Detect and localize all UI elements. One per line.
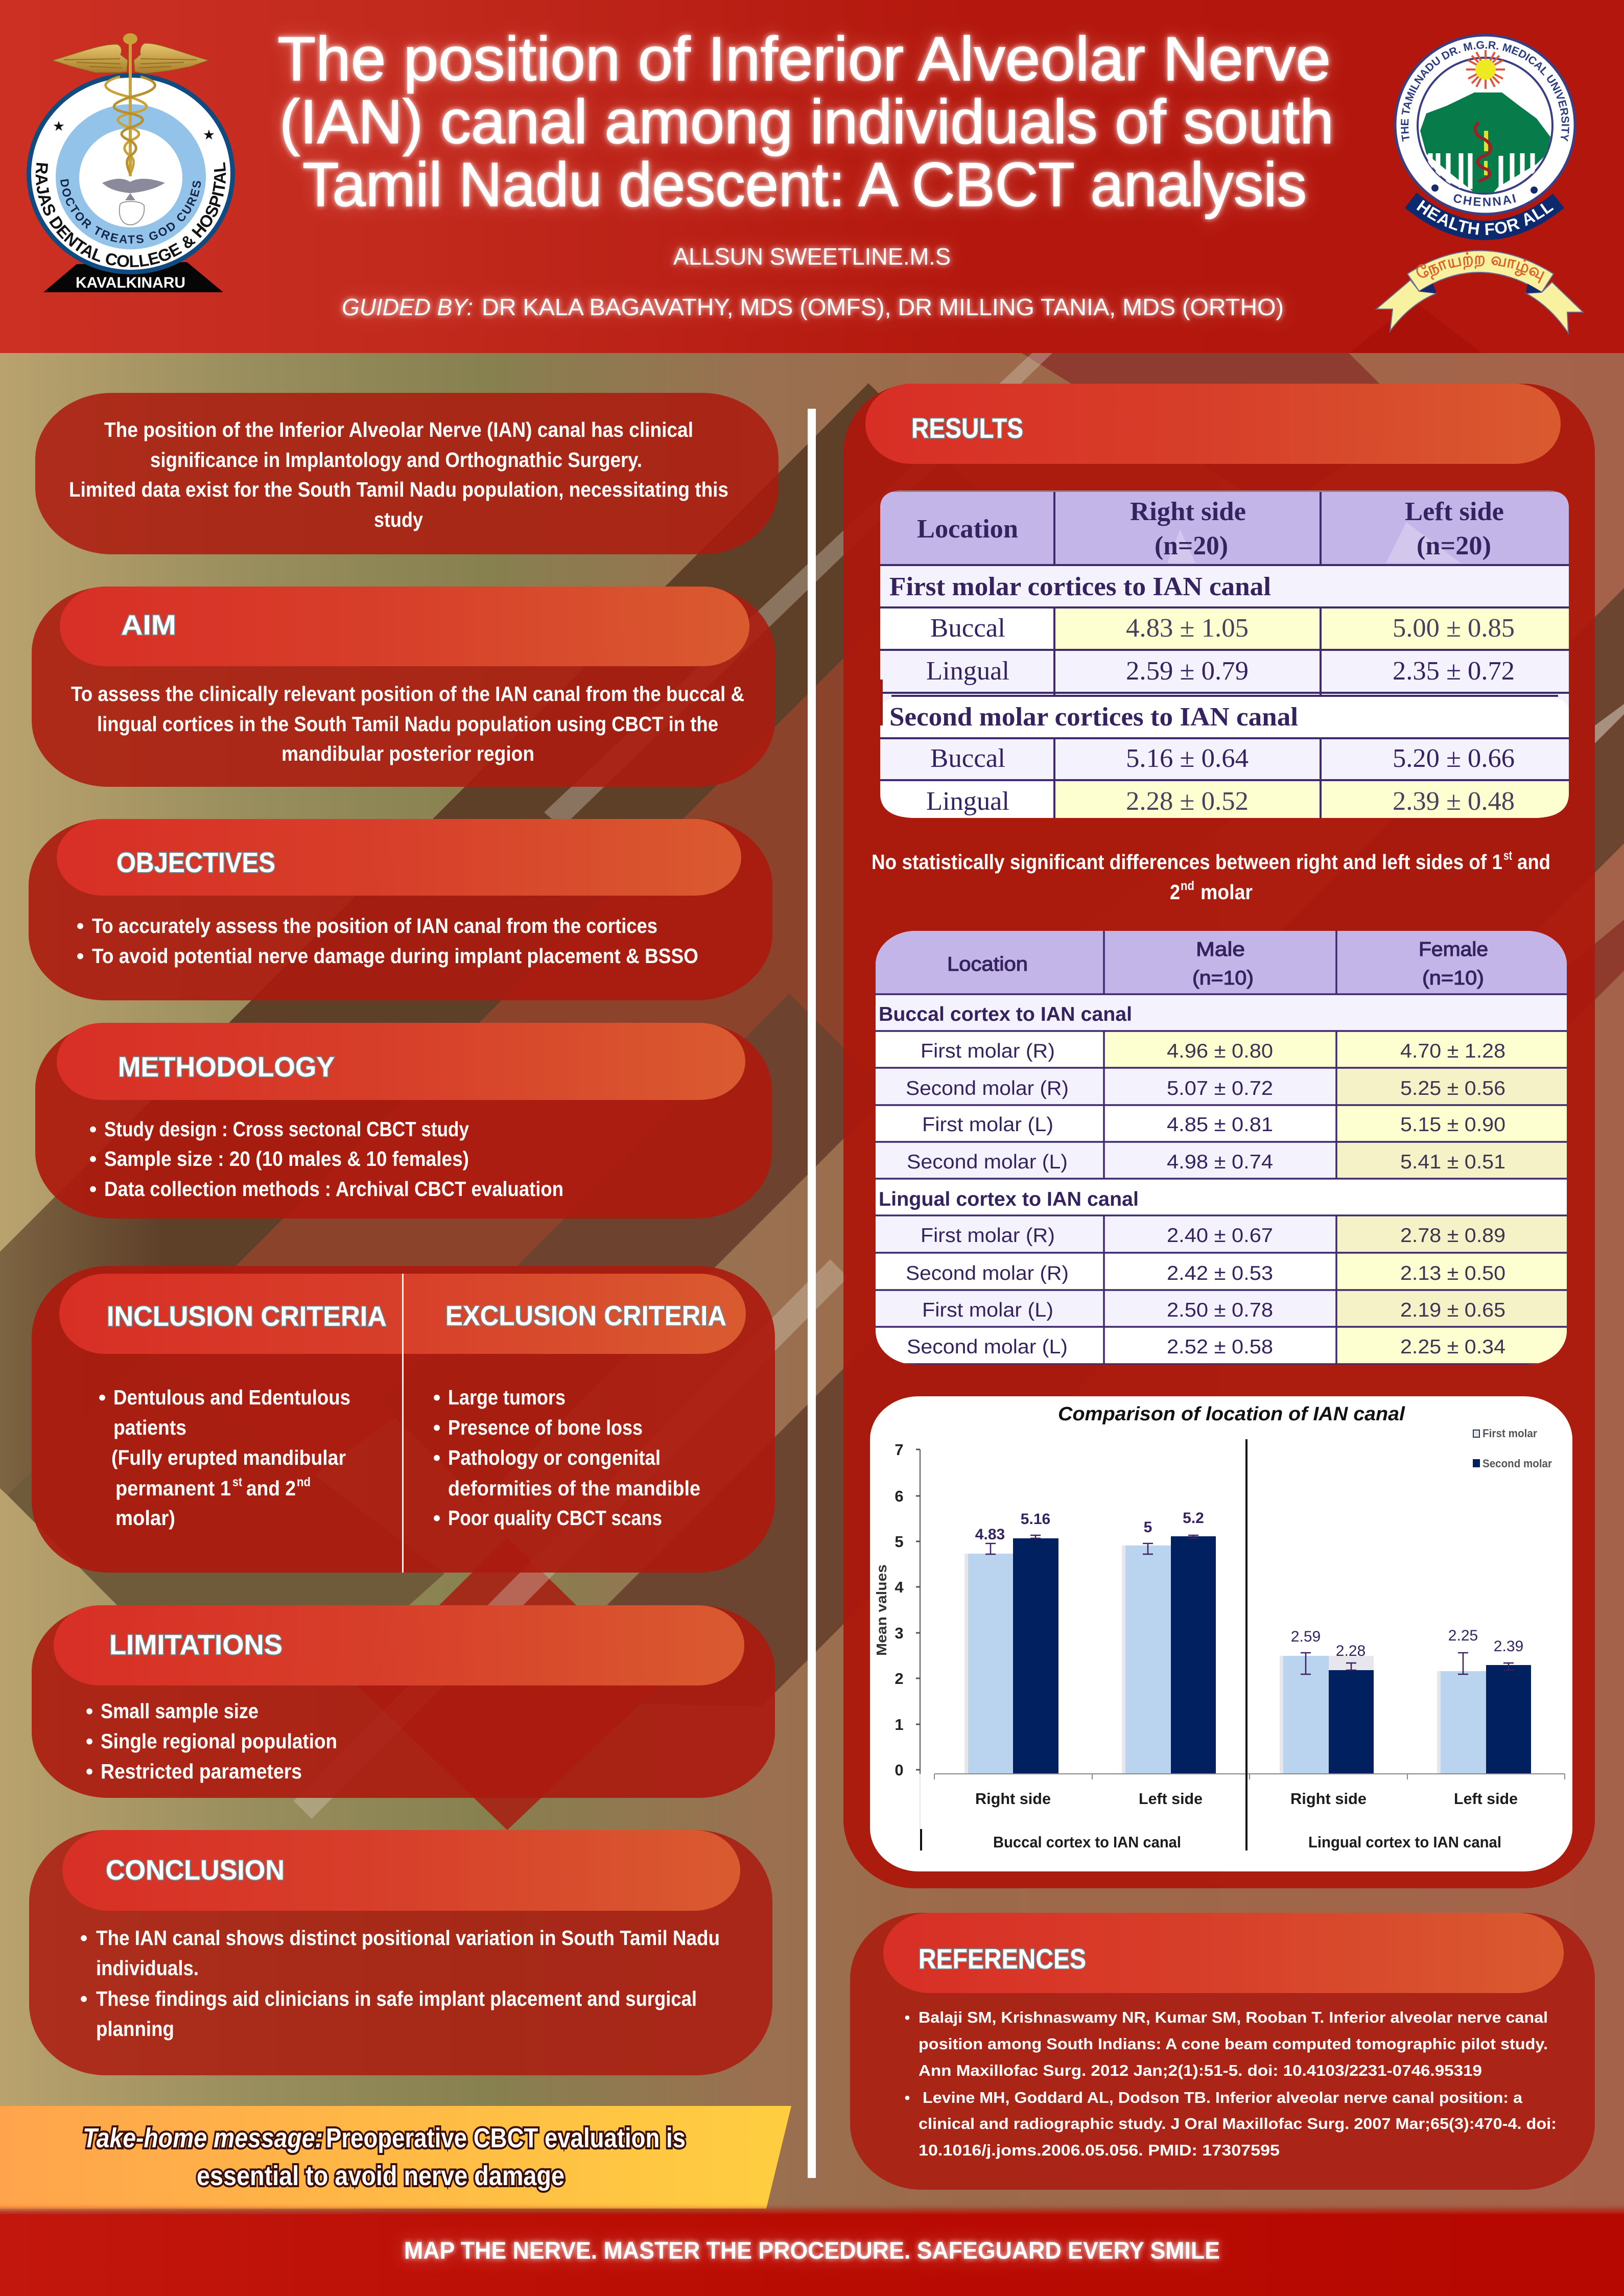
- table: right vs left side: 5.20 ± 0.66: [1393, 744, 1515, 773]
- list: inclusion criteria: permanent 1: [115, 1477, 231, 1500]
- table: male vs female: 5.15 ± 0.90: [1400, 1114, 1505, 1136]
- author: ALLSUN SWEETLINE.M.S: [673, 243, 951, 270]
- list: references: [905, 2008, 1557, 2159]
- list: references: Balaji SM, Krishnaswamy NR, Kumar SM, Rooban T. Inferior alveolar nerve canal: [919, 2008, 1548, 2026]
- list: references: Levine MH, Goddard AL, Dodson TB. Inferior alveolar nerve canal position: a: [923, 2089, 1523, 2106]
- text: aim: To assess the clinically relevant position of the IAN canal from the buccal &: [71, 682, 744, 706]
- table: male vs female: 4.96 ± 0.80: [1167, 1040, 1273, 1062]
- table: male vs female: First molar (L): [922, 1299, 1053, 1321]
- list: exclusion criteria: •: [433, 1386, 440, 1409]
- list: references: Ann Maxillofac Surg. 2012 Jan;2(1):51-5. doi: 10.4103/2231-0746.95319: [919, 2061, 1482, 2079]
- list: objectives: To accurately assess the position of IAN canal from the cortices: [92, 914, 657, 938]
- list: inclusion criteria: [99, 1386, 350, 1530]
- table: right vs left side: Location: [917, 514, 1018, 544]
- table: right vs left side: Right side: [1130, 497, 1246, 526]
- list: exclusion criteria: •: [433, 1416, 440, 1439]
- logo: Rajas Dental College: ★: [53, 119, 65, 134]
- table: male vs female: (n=10): [1192, 967, 1254, 989]
- panel: methodology: [35, 1023, 772, 1219]
- x axis: Right side: [975, 1790, 1051, 1808]
- list: references: 10.1016/j.joms.2006.05.056. PMID: 17307595: [919, 2141, 1280, 2159]
- table: right vs left side: 2.35 ± 0.72: [1393, 657, 1515, 686]
- value labels: 2.39: [1494, 1638, 1523, 1655]
- list: objectives: To avoid potential nerve damage during implant placement & BSSO: [92, 944, 698, 968]
- value labels: 2.28: [1336, 1643, 1366, 1659]
- y axis: [874, 1441, 920, 1829]
- chart legend: Second molar: [1482, 1457, 1552, 1470]
- list: limitations: Small sample size: [101, 1699, 258, 1723]
- panel: aim: [32, 587, 775, 787]
- list: methodology: •: [89, 1117, 97, 1141]
- panel: references: [850, 1913, 1595, 2190]
- y axis: Mean values: [874, 1564, 889, 1656]
- table: right vs left side: 2.39 ± 0.48: [1393, 787, 1515, 816]
- table: male vs female: First molar (R): [921, 1040, 1055, 1062]
- take-home banner: Preoperative CBCT evaluation is: [326, 2123, 686, 2153]
- table: right vs left side: 5.16 ± 0.64: [1126, 744, 1249, 773]
- text: aim: lingual cortices in the South Tamil Nadu population using CBCT in the: [97, 712, 718, 736]
- logo: Tamilnadu Dr MGR Medical University: HEALTH FOR ALL: [1416, 200, 1554, 235]
- table: right vs left side: Lingual: [926, 657, 1009, 686]
- chart legend: [1473, 1427, 1552, 1470]
- panel: limitations: [32, 1605, 775, 1798]
- list: exclusion criteria: •: [433, 1446, 440, 1469]
- panel: introduction: study: [374, 508, 423, 531]
- table: male vs female: Second molar (R): [906, 1077, 1069, 1099]
- list: methodology: Data collection methods : Archival CBCT evaluation: [104, 1177, 563, 1201]
- value labels: [975, 1510, 1523, 1659]
- heading: aim: AIM: [121, 609, 176, 641]
- heading: references: REFERENCES: [919, 1943, 1086, 1975]
- text: no significant difference: 2: [1170, 880, 1180, 904]
- list: limitations: •: [86, 1729, 93, 1753]
- heading: exclusion criteria: EXCLUSION CRITERIA: [445, 1300, 726, 1331]
- heading: results: RESULTS: [911, 412, 1023, 444]
- list: conclusion: individuals.: [96, 1956, 199, 1980]
- bars: [964, 1536, 1531, 1774]
- table: right vs left side: Left side: [1405, 497, 1504, 526]
- list: exclusion criteria: Presence of bone loss: [448, 1416, 643, 1439]
- title: The position of Inferior Alveolar Nerve: [277, 24, 1331, 93]
- title: [277, 24, 1334, 219]
- x axis: Lingual cortex to IAN canal: [1308, 1833, 1501, 1851]
- list: inclusion criteria: (Fully erupted mandibular: [111, 1446, 346, 1469]
- list: conclusion: These findings aid clinicians in safe implant placement and surgical: [96, 1987, 697, 2010]
- list: inclusion criteria: patients: [113, 1416, 186, 1439]
- y axis: 7: [895, 1441, 904, 1459]
- text: aim: [71, 682, 744, 765]
- heading: objectives: OBJECTIVES: [116, 847, 275, 878]
- logo: Tamilnadu Dr MGR Medical University: THE TAMILNADU DR. M.G.R. MEDICAL UNIVERSITY: [1401, 41, 1569, 142]
- header band: [0, 0, 1624, 353]
- table: right vs left side: 2.28 ± 0.52: [1126, 787, 1249, 816]
- y axis: 2: [895, 1670, 904, 1688]
- y axis: 5: [895, 1533, 904, 1551]
- table: male vs female: 2.40 ± 0.67: [1167, 1225, 1273, 1247]
- list: limitations: Single regional population: [101, 1729, 337, 1753]
- value labels: 4.83: [975, 1526, 1005, 1543]
- x axis: Left side: [1454, 1790, 1518, 1808]
- chart legend: First molar: [1482, 1427, 1537, 1440]
- panel: inclusion and exclusion criteria: [32, 1266, 775, 1573]
- table: male vs female: Second molar (R): [906, 1262, 1069, 1284]
- list: exclusion criteria: Poor quality CBCT scans: [448, 1506, 662, 1530]
- list: inclusion criteria: molar): [115, 1506, 175, 1530]
- table: male vs female: First molar (L): [922, 1114, 1053, 1136]
- panel: conclusion: [29, 1830, 772, 2075]
- table: right vs left side: (n=20): [1417, 531, 1491, 560]
- y axis: 6: [895, 1487, 904, 1505]
- value labels: 5.16: [1021, 1511, 1050, 1528]
- x axis: Right side: [1290, 1790, 1367, 1808]
- panel: introduction: Limited data exist for the South Tamil Nadu population, necessitating this: [69, 478, 728, 501]
- table: right vs left side: [880, 489, 1569, 818]
- table: male vs female: Male: [1196, 939, 1245, 960]
- table: male vs female: 5.41 ± 0.51: [1400, 1151, 1505, 1173]
- table: male vs female: 4.85 ± 0.81: [1167, 1114, 1273, 1136]
- y axis: 1: [895, 1716, 904, 1733]
- table: right vs left side: 5.00 ± 0.85: [1393, 614, 1515, 643]
- take-home banner: essential to avoid nerve damage: [197, 2161, 564, 2191]
- list: references: •: [905, 2009, 910, 2026]
- panel: introduction: The position of the Inferior Alveolar Nerve (IAN) canal has clinical: [104, 418, 693, 441]
- table: right vs left side: Buccal: [930, 744, 1005, 773]
- table: male vs female: 2.78 ± 0.89: [1400, 1225, 1505, 1247]
- text: aim: mandibular posterior region: [281, 742, 534, 765]
- logo: Rajas Dental College: ★: [203, 127, 215, 143]
- table: male vs female: [876, 931, 1567, 1365]
- table: male vs female: 2.52 ± 0.58: [1167, 1336, 1273, 1358]
- list: inclusion criteria: st: [232, 1475, 243, 1489]
- text: no significant difference: molar: [1201, 880, 1253, 904]
- table: right vs left side: 2.59 ± 0.79: [1126, 657, 1249, 686]
- list: inclusion criteria: nd: [297, 1475, 311, 1489]
- title: Tamil Nadu descent: A CBCT analysis: [302, 150, 1307, 219]
- table: right vs left side: Second molar cortices to IAN canal: [889, 702, 1298, 732]
- list: inclusion criteria: •: [99, 1386, 106, 1409]
- logo: Rajas Dental College: [27, 33, 235, 292]
- list: conclusion: •: [80, 1926, 87, 1950]
- table: male vs female: Buccal cortex to IAN canal: [879, 1003, 1132, 1025]
- chart title: Comparison of location of IAN canal: [1058, 1403, 1405, 1425]
- list: conclusion: planning: [96, 2017, 174, 2041]
- text: no significant difference: st: [1503, 849, 1513, 863]
- table: male vs female: Female: [1419, 939, 1488, 960]
- list: methodology: [89, 1117, 563, 1201]
- text: no significant difference: nd: [1181, 879, 1194, 893]
- take-home banner: [0, 2106, 791, 2209]
- table: male vs female: 4.98 ± 0.74: [1167, 1151, 1273, 1173]
- y axis: 3: [895, 1624, 904, 1642]
- logo: Rajas Dental College: KAVALKINARU: [76, 274, 185, 291]
- list: references: •: [905, 2090, 910, 2106]
- table: right vs left side: (n=20): [1155, 531, 1228, 560]
- list: limitations: •: [86, 1699, 93, 1723]
- logo: Rajas Dental College: DOCTOR TREATS GOD CURES: [60, 179, 201, 244]
- heading: methodology: METHODOLOGY: [118, 1051, 335, 1083]
- table: right vs left side: Buccal: [930, 614, 1005, 643]
- logo: Tamilnadu Dr MGR Medical University: நோயற்ற வாழ்வு: [1413, 249, 1548, 285]
- x axis: Left side: [1139, 1790, 1203, 1808]
- footer tagline: MAP THE NERVE. MASTER THE PROCEDURE. SAFEGUARD EVERY SMILE: [404, 2237, 1220, 2264]
- table: right vs left side: First molar cortices to IAN canal: [889, 572, 1271, 601]
- list: objectives: •: [77, 944, 84, 968]
- text: no significant difference: [872, 849, 1550, 904]
- list: methodology: Sample size : 20 (10 males & 10 females): [104, 1147, 469, 1170]
- list: limitations: •: [86, 1760, 93, 1783]
- list: objectives: •: [77, 914, 84, 938]
- table: male vs female: (n=10): [1422, 967, 1484, 989]
- value labels: 2.59: [1291, 1628, 1321, 1645]
- table: male vs female: 5.25 ± 0.56: [1400, 1077, 1505, 1099]
- table: male vs female: 2.25 ± 0.34: [1400, 1336, 1505, 1358]
- list: inclusion criteria: and 2: [246, 1477, 296, 1500]
- list: inclusion criteria: Dentulous and Edentulous: [113, 1386, 350, 1409]
- error bars: [985, 1535, 1514, 1674]
- list: conclusion: The IAN canal shows distinct positional variation in South Tamil Nadu: [96, 1926, 720, 1950]
- take-home banner: Take-home message:: [83, 2123, 323, 2153]
- table: male vs female: 2.19 ± 0.65: [1400, 1299, 1505, 1321]
- list: exclusion criteria: Pathology or congenital: [448, 1446, 661, 1469]
- logo: Tamilnadu Dr MGR Medical University: CHENNAI: [1452, 191, 1519, 209]
- heading: conclusion: CONCLUSION: [106, 1854, 285, 1886]
- list: exclusion criteria: •: [433, 1506, 440, 1530]
- x axis: Buccal cortex to IAN canal: [993, 1833, 1181, 1851]
- y axis: 0: [895, 1761, 904, 1779]
- table: male vs female: 5.07 ± 0.72: [1167, 1077, 1273, 1099]
- table: male vs female: Lingual cortex to IAN canal: [879, 1188, 1139, 1210]
- chart: comparison of location of IAN canal: [870, 1396, 1572, 1871]
- table: male vs female: 4.70 ± 1.28: [1400, 1040, 1505, 1062]
- central divider: [808, 409, 816, 2178]
- text: no significant difference: and: [1517, 850, 1550, 874]
- guides: DR KALA BAGAVATHY, MDS (OMFS), DR MILLING TANIA, MDS (ORTHO): [482, 294, 1284, 320]
- list: conclusion: •: [80, 1987, 87, 2010]
- x axis: [934, 1774, 1565, 1851]
- heading: limitations: LIMITATIONS: [109, 1629, 283, 1660]
- list: references: clinical and radiographic study. J Oral Maxillofac Surg. 2007 Mar;65(3):470-4. doi:: [919, 2115, 1557, 2133]
- list: methodology: Study design : Cross sectonal CBCT study: [104, 1117, 469, 1141]
- table: male vs female: First molar (R): [921, 1225, 1055, 1247]
- table: male vs female: Second molar (L): [907, 1336, 1068, 1358]
- list: methodology: •: [89, 1147, 97, 1170]
- panel: results: [843, 384, 1595, 1888]
- table: male vs female: 2.13 ± 0.50: [1400, 1262, 1505, 1284]
- list: conclusion: [80, 1926, 720, 2041]
- footer band: [0, 2210, 1624, 2296]
- heading: inclusion criteria: INCLUSION CRITERIA: [107, 1300, 387, 1332]
- list: references: position among South Indians: A cone beam computed tomographic pilot study.: [919, 2035, 1548, 2053]
- table: right vs left side: Lingual: [926, 787, 1009, 816]
- list: limitations: [86, 1699, 337, 1783]
- table: right vs left side: 4.83 ± 1.05: [1126, 614, 1249, 643]
- table: male vs female: Location: [947, 953, 1028, 975]
- value labels: 5.2: [1183, 1510, 1204, 1527]
- list: exclusion criteria: Large tumors: [448, 1386, 566, 1409]
- guides: GUIDED BY:: [342, 294, 473, 320]
- y axis: 4: [895, 1578, 904, 1596]
- logo: Rajas Dental College: RAJAS DENTAL COLLEGE & HOSPITAL: [36, 162, 226, 267]
- list: objectives: [77, 914, 698, 968]
- table: male vs female: 2.42 ± 0.53: [1167, 1262, 1273, 1284]
- table: male vs female: 2.50 ± 0.78: [1167, 1299, 1273, 1321]
- title: (IAN) canal among individuals of south: [279, 87, 1334, 156]
- list: methodology: •: [89, 1177, 97, 1201]
- list: exclusion criteria: deformities of the mandible: [448, 1477, 700, 1500]
- panel: objectives: [29, 819, 772, 1000]
- text: no significant difference: No statistically significant differences between right and left sides of 1: [872, 850, 1502, 874]
- table: male vs female: Second molar (L): [907, 1151, 1068, 1173]
- logo: Tamilnadu Dr MGR Medical University: [1375, 34, 1585, 335]
- list: limitations: Restricted parameters: [101, 1760, 302, 1783]
- value labels: 5: [1144, 1519, 1152, 1536]
- panel: introduction: significance in Implantology and Orthognathic Surgery.: [150, 448, 642, 472]
- panel: introduction: [35, 393, 779, 554]
- list: exclusion criteria: [433, 1386, 700, 1530]
- value labels: 2.25: [1448, 1627, 1478, 1644]
